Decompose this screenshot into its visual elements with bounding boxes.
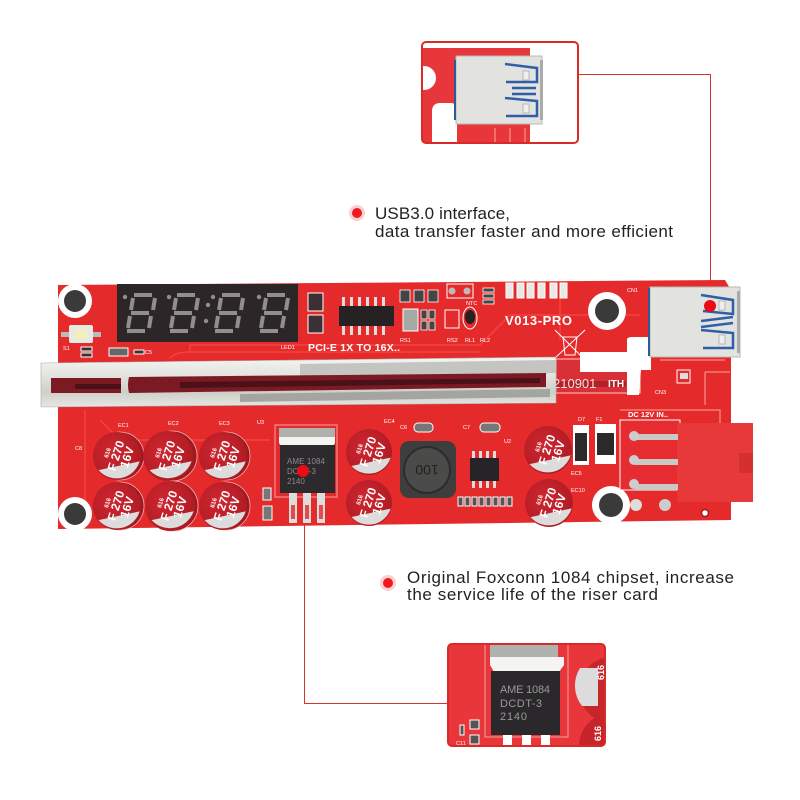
capacitor EC7: 616 bbox=[157, 497, 166, 509]
board label: DC 12V: DC 12V IN.. bbox=[628, 410, 668, 419]
silkscreen labels: RS1 bbox=[400, 338, 411, 344]
capacitor EC3 bbox=[199, 432, 250, 482]
callout bullet bbox=[380, 575, 396, 591]
inset border bbox=[422, 42, 578, 143]
capacitor EC2: 616 bbox=[155, 447, 164, 459]
small SMD row top bbox=[403, 283, 567, 331]
silkscreen labels: F1 bbox=[596, 417, 602, 423]
capacitor EC1: 616 bbox=[104, 447, 113, 459]
callout text bbox=[375, 204, 673, 241]
tactile switch S1 bbox=[61, 325, 101, 343]
RS2 component bbox=[445, 310, 459, 328]
inset outline bbox=[485, 644, 568, 737]
mounting holes bbox=[58, 284, 630, 531]
PCB base bbox=[58, 280, 731, 529]
inset chip body: AME 1084 bbox=[500, 684, 550, 696]
silkscreen labels: EC10 bbox=[571, 488, 585, 494]
silkscreen labels: C5 bbox=[145, 350, 152, 356]
silkscreen labels: D7 bbox=[578, 417, 585, 423]
inset chip body: 2140 bbox=[500, 711, 527, 723]
lower right through-holes bbox=[630, 499, 708, 516]
slot extension and text block bbox=[553, 359, 640, 393]
capacitor EC4: 16V bbox=[369, 441, 389, 466]
inset USB port bbox=[454, 56, 543, 124]
silkscreen labels: C6 bbox=[400, 425, 407, 431]
inset capacitors: 616 bbox=[593, 726, 603, 741]
silkscreen labels: C7 bbox=[463, 425, 470, 431]
callout bullet bbox=[349, 205, 365, 221]
white outline traces right side bbox=[620, 360, 730, 500]
inset capacitors: 616 bbox=[596, 665, 606, 680]
capacitor EC8: 16V bbox=[223, 495, 243, 520]
panel: riser card board bbox=[41, 280, 753, 532]
silkscreen labels: RS2 bbox=[447, 338, 458, 344]
silkscreen labels: EC1 bbox=[118, 423, 129, 429]
capacitor EC3: 16V bbox=[223, 445, 243, 470]
capacitor EC8: F 270 bbox=[211, 489, 234, 522]
inset mounting hole bbox=[423, 66, 436, 90]
recycling bin mark bbox=[555, 330, 585, 360]
callout: USB3.0 bbox=[349, 204, 673, 241]
silkscreen labels: LED1 bbox=[281, 345, 295, 351]
inductor: 100 bbox=[415, 462, 439, 478]
J1 header and resistors bbox=[400, 284, 494, 330]
callout text: Original Foxconn 1084 chipset, increase bbox=[407, 568, 734, 587]
silkscreen labels: EC2 bbox=[168, 421, 179, 427]
board label: PCI-E: PCI-E 1X TO 16X.. bbox=[308, 342, 400, 354]
silkscreen labels: EC3 bbox=[219, 421, 230, 427]
U2 small chip bbox=[470, 451, 499, 488]
silkscreen labels: EC5 bbox=[571, 471, 582, 477]
capacitor EC5: 616 bbox=[535, 441, 544, 453]
inset PCB bbox=[422, 48, 530, 143]
C6 and C7 ceramics bbox=[263, 423, 500, 520]
capacitor EC4 bbox=[346, 429, 393, 477]
inset chip pins bbox=[503, 735, 550, 745]
U3 regulator chip: AME 1084 bbox=[287, 457, 326, 466]
silkscreen labels bbox=[63, 288, 666, 494]
marker dot: chipset bbox=[297, 465, 309, 477]
silkscreen labels: NTC bbox=[466, 301, 477, 307]
capacitor EC6: F 270 bbox=[105, 489, 128, 522]
callout text: USB3.0 interface, bbox=[375, 204, 510, 223]
capacitor EC1 bbox=[93, 432, 144, 482]
panel: USB inset photo bbox=[412, 42, 578, 143]
12V power connector bbox=[620, 420, 753, 502]
capacitor row below U2 bbox=[458, 497, 512, 506]
capacitors bbox=[93, 426, 574, 532]
inset labels: C11 bbox=[456, 741, 466, 747]
capacitor EC6: 616 bbox=[104, 497, 113, 509]
capacitor EC7: 16V bbox=[170, 495, 190, 520]
white retention clip bbox=[580, 337, 651, 395]
U3 regulator chip: DCDT-3 bbox=[287, 467, 316, 476]
capacitor EC6 bbox=[93, 482, 144, 532]
board traces bbox=[85, 290, 640, 520]
marker dot: USB port bbox=[704, 300, 716, 312]
capacitor EC10: 16V bbox=[549, 492, 569, 517]
small component under USB port bbox=[677, 370, 690, 383]
capacitor EC9: F 270 bbox=[357, 486, 380, 519]
U3 regulator chip: 2140 bbox=[287, 477, 305, 486]
capacitor EC1: 16V bbox=[117, 445, 137, 470]
capacitor EC2 bbox=[143, 431, 197, 482]
capacitor EC3: 616 bbox=[210, 447, 219, 459]
silkscreen labels: RL2 bbox=[480, 338, 490, 344]
connector line: chipset callout bbox=[304, 471, 447, 704]
silkscreen labels: S1 bbox=[63, 346, 70, 352]
capacitor EC9: 616 bbox=[356, 494, 365, 506]
silkscreen labels: U2 bbox=[504, 439, 511, 445]
slot extension and text block: 210901 bbox=[553, 376, 596, 391]
capacitor EC7 bbox=[145, 481, 198, 532]
callout: Foxconn chipset bbox=[380, 568, 734, 604]
capacitor EC3: F 270 bbox=[211, 439, 234, 472]
PCI-E slot bbox=[41, 357, 556, 407]
callout text: data transfer faster and more efficient bbox=[375, 222, 673, 241]
capacitor EC10: 616 bbox=[536, 494, 545, 506]
callout text: the service life of the riser card bbox=[407, 585, 658, 604]
capacitor EC1: F 270 bbox=[105, 439, 128, 472]
small SMD components near switch bbox=[81, 347, 144, 357]
inset border bbox=[448, 644, 605, 746]
capacitor EC2: F 270 bbox=[156, 439, 179, 472]
capacitor EC8 bbox=[199, 482, 250, 532]
silkscreen labels: U3 bbox=[257, 420, 264, 426]
inset SMD parts bbox=[460, 720, 479, 744]
inset chip body bbox=[491, 671, 560, 735]
inset chip tab bbox=[490, 645, 558, 657]
capacitor EC10: F 270 bbox=[537, 486, 560, 519]
capacitor EC5: 16V bbox=[548, 439, 568, 464]
inductor bbox=[400, 441, 456, 498]
capacitor EC10 bbox=[525, 479, 574, 529]
inset capacitors bbox=[574, 658, 604, 745]
USB 3.0 port bbox=[648, 287, 740, 357]
capacitor EC9 bbox=[346, 480, 393, 528]
capacitor EC5: F 270 bbox=[536, 433, 559, 466]
capacitor EC4: 616 bbox=[356, 443, 365, 455]
capacitor EC9: 16V bbox=[369, 492, 389, 517]
inset chip body: DCDT-3 bbox=[500, 698, 542, 710]
inset clip bbox=[432, 103, 457, 143]
board label: model: V013-PRO bbox=[505, 313, 572, 328]
capacitor EC2: 16V bbox=[168, 445, 188, 470]
NTC sensor bbox=[463, 307, 477, 329]
slot extension and text block: ITH bbox=[608, 379, 624, 390]
callout text bbox=[407, 568, 734, 604]
capacitor EC5 bbox=[524, 426, 573, 476]
capacitor EC7: F 270 bbox=[158, 489, 181, 522]
SOIC chip and resistor networks bbox=[308, 293, 394, 335]
diode and fuse bbox=[573, 424, 616, 465]
silkscreen labels: CN3 bbox=[655, 390, 666, 396]
silkscreen labels: EC4 bbox=[384, 419, 395, 425]
inset lower board detail bbox=[495, 128, 525, 143]
panel: chipset inset photo bbox=[447, 643, 606, 747]
capacitor EC4: F 270 bbox=[357, 435, 380, 468]
silkscreen labels: C8 bbox=[75, 446, 82, 452]
capacitor EC8: 616 bbox=[210, 497, 219, 509]
connector line: USB callout bbox=[579, 74, 710, 306]
seven-segment LED display bbox=[117, 284, 298, 342]
U3 regulator chip bbox=[275, 425, 337, 523]
capacitor EC6: 16V bbox=[117, 495, 137, 520]
silkscreen labels: RL1 bbox=[465, 338, 475, 344]
silkscreen labels: CN1 bbox=[627, 288, 638, 294]
